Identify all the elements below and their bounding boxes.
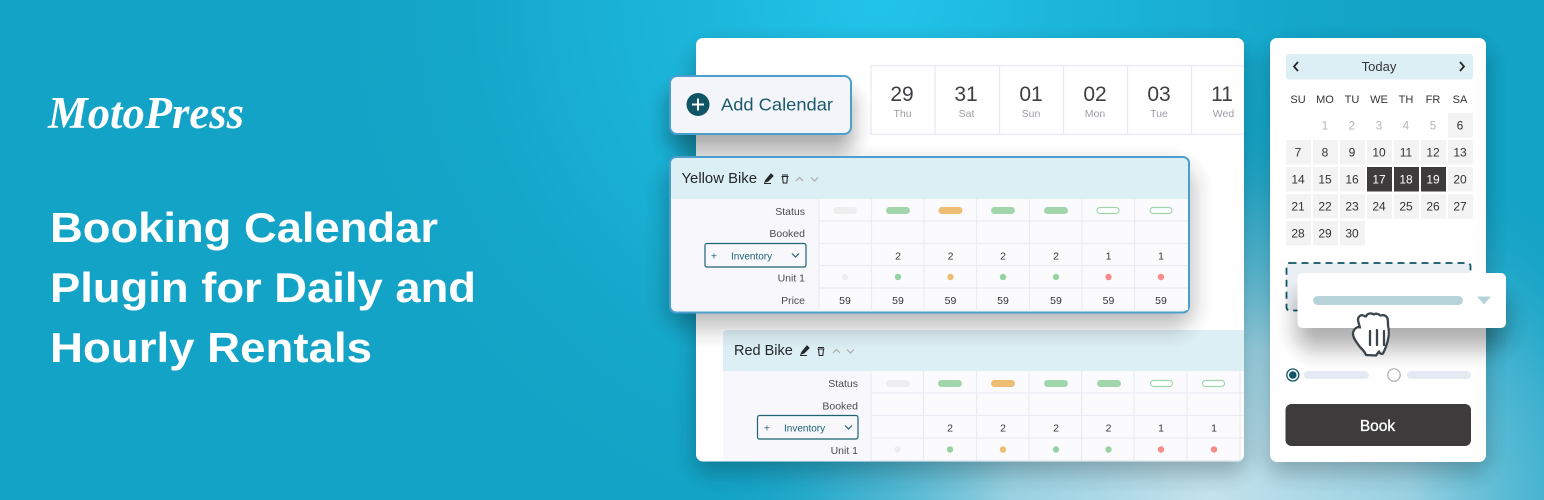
grid: Red Bike: [871, 371, 1251, 466]
title: Plugin for Daily and: [50, 264, 476, 311]
row: inventory: 2: [947, 422, 953, 434]
row: inventory: Inventory: [784, 424, 825, 434]
date header row: 29: [890, 83, 914, 106]
date grid: 15: [1318, 172, 1332, 186]
date grid: 28: [1291, 226, 1305, 240]
row: booked: Booked: [769, 228, 805, 240]
logo: MotoPress: MotoPress: [47, 88, 244, 138]
date grid: 24: [1372, 200, 1386, 214]
row: status: Status: [828, 378, 858, 390]
icon: hand cursor: [1353, 313, 1389, 356]
row: inventory: 2: [1053, 422, 1059, 434]
date header row: Thu: [893, 108, 912, 120]
button: Add Calendar: [670, 76, 851, 134]
row: status: Status: [775, 206, 805, 218]
date grid: 3: [1376, 120, 1382, 132]
row: price: 59: [1050, 295, 1062, 307]
date grid: 21: [1291, 200, 1305, 214]
date grid: 14: [1291, 172, 1305, 186]
row: inventory: [758, 416, 1217, 439]
row: inventory: 2: [1053, 250, 1059, 262]
row: inventory: Inventory: [731, 252, 772, 262]
date header row: Sun: [1022, 108, 1040, 120]
date header row: Wed: [1213, 108, 1234, 120]
row: unit 1: [778, 272, 1164, 284]
date grid: 23: [1345, 200, 1359, 214]
month navigation: Today: [1362, 59, 1397, 74]
row: price: 59: [997, 295, 1009, 307]
row: price: 59: [839, 295, 851, 307]
row: booked: Booked: [822, 400, 858, 412]
heading: Yellow Bike: Yellow Bike: [682, 171, 757, 187]
date grid: 20: [1453, 172, 1467, 186]
row: inventory: 2: [948, 250, 954, 262]
weekday labels: FR: [1426, 94, 1440, 106]
date grid: [1286, 113, 1473, 246]
month navigation: [1286, 54, 1473, 80]
date grid: 25: [1399, 200, 1413, 214]
grid: Yellow Bike: [819, 199, 1188, 310]
date header row: 31: [954, 83, 978, 106]
row: inventory: +: [764, 424, 770, 434]
title: [50, 204, 476, 371]
icons: edit, delete, reorder: [800, 346, 854, 356]
date grid: 19: [1426, 172, 1440, 186]
row: unit 1: [831, 446, 1218, 454]
date grid: 29: [1318, 226, 1332, 240]
date grid: 2: [1349, 120, 1355, 132]
weekday labels: SA: [1453, 94, 1468, 106]
row: price: 59: [892, 295, 904, 307]
dropdown popup: [1298, 273, 1506, 328]
dashed drop target: [1286, 263, 1470, 310]
panel: main calendar: [696, 38, 1253, 470]
date grid: 6: [1457, 118, 1464, 132]
date grid: 22: [1318, 200, 1332, 214]
row: status: [828, 380, 1226, 388]
date header row: 11: [1211, 83, 1233, 106]
row: unit 1: Unit 1: [778, 272, 805, 284]
date grid: 16: [1345, 172, 1359, 186]
row: inventory: 2: [895, 250, 901, 262]
panel: Yellow Bike: [670, 157, 1189, 312]
heading: Red Bike: Red Bike: [734, 343, 793, 359]
row: inventory: 2: [1000, 422, 1006, 434]
row: status: [775, 206, 1172, 218]
date grid: 17: [1372, 172, 1386, 186]
weekday labels: MO: [1316, 94, 1334, 106]
date header row: Tue: [1150, 108, 1168, 120]
date grid: 13: [1453, 146, 1467, 160]
date grid: 30: [1345, 226, 1359, 240]
button: Book: [1286, 404, 1471, 446]
row: inventory: 2: [1000, 250, 1006, 262]
date header row: Sat: [959, 108, 974, 120]
date grid: 5: [1430, 120, 1436, 132]
date grid: 18: [1399, 172, 1413, 186]
date header row: 03: [1147, 83, 1171, 106]
weekday labels: SU: [1290, 94, 1306, 106]
date grid: 1: [1322, 120, 1328, 132]
row: inventory: 1: [1106, 250, 1112, 262]
panel: booking widget: [1270, 38, 1486, 462]
row: inventory: [705, 244, 1164, 267]
date header row: 02: [1083, 83, 1107, 106]
date header row: Mon: [1085, 108, 1105, 120]
row: price: Price: [781, 295, 805, 307]
row: price: 59: [945, 295, 956, 307]
date grid: 26: [1426, 200, 1440, 214]
row: price: 59: [1103, 295, 1114, 307]
date grid: 27: [1453, 200, 1467, 214]
title: Hourly Rentals: [50, 324, 372, 371]
date grid: 4: [1403, 120, 1410, 132]
date grid: 9: [1349, 146, 1356, 160]
date grid: 10: [1372, 146, 1386, 160]
button: Book: Book: [1360, 418, 1395, 435]
button: Add Calendar: Add Calendar: [721, 94, 833, 114]
row: inventory: 2: [1106, 422, 1112, 434]
date grid: 12: [1426, 146, 1440, 160]
date grid: 7: [1295, 146, 1302, 160]
row: inventory: 1: [1211, 422, 1217, 434]
title: Booking Calendar: [50, 204, 438, 251]
icons: edit, delete, reorder: [764, 174, 818, 184]
row: price: 59: [1155, 295, 1167, 307]
radio options: [1287, 369, 1471, 381]
panel: Red Bike: [723, 330, 1253, 470]
row: inventory: 1: [1158, 250, 1164, 262]
row: inventory: 1: [1158, 422, 1164, 434]
date header row: [871, 65, 1251, 134]
date grid: 8: [1322, 146, 1329, 160]
weekday labels: TH: [1399, 94, 1413, 106]
row: unit 1: Unit 1: [831, 445, 858, 457]
date header row: 01: [1019, 83, 1043, 106]
row: inventory: +: [711, 252, 717, 262]
weekday labels: TU: [1345, 94, 1359, 106]
weekday labels: [1290, 94, 1468, 106]
icon: plus circle: [686, 93, 710, 116]
row: price: [781, 295, 1167, 307]
weekday labels: WE: [1370, 94, 1388, 106]
date grid: 11: [1400, 146, 1413, 160]
